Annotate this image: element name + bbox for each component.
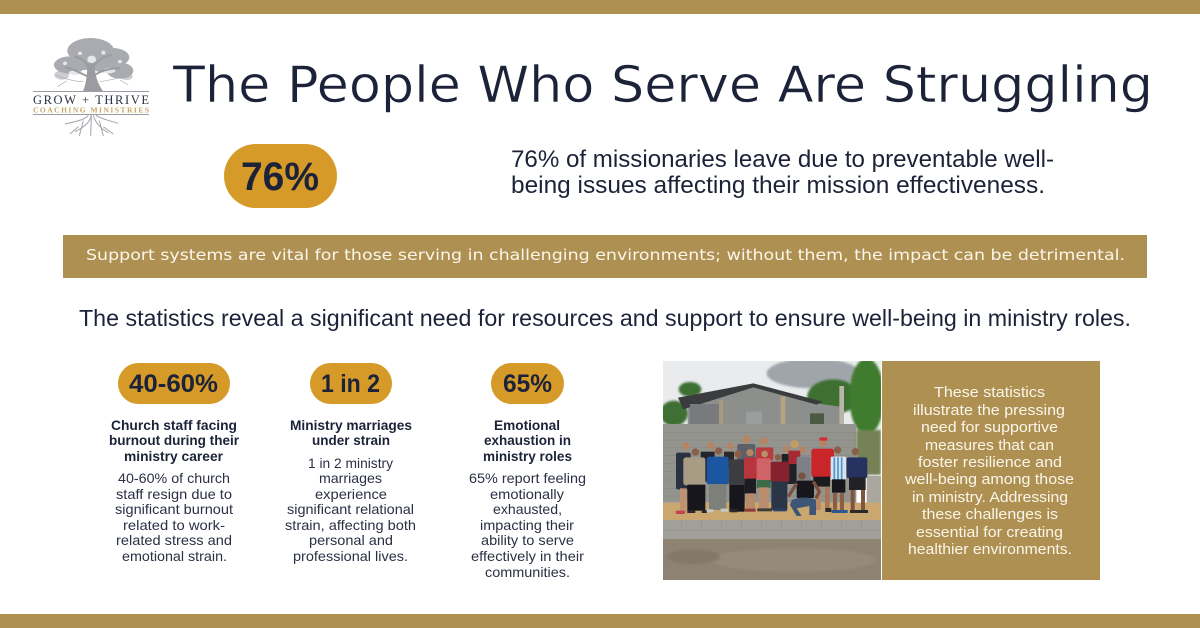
title: The People Who Serve Are Struggling: [172, 56, 1153, 114]
back row: [676, 444, 834, 512]
column body: strain, affecting both: [285, 517, 416, 533]
column body: [469, 470, 586, 580]
panel: summary callout: these challenges is: [922, 506, 1058, 523]
column heading: [483, 417, 572, 464]
sand: [663, 503, 881, 520]
column body: [115, 470, 233, 564]
column heading: Emotional: [494, 417, 560, 433]
column heading: burnout during their: [109, 432, 240, 448]
panel: summary callout: well-being among those: [904, 471, 1074, 488]
subheading: The statistics reveal a significant need for resources and support to ensure well-being in ministry roles.: [79, 305, 1131, 331]
column heading: ministry roles: [483, 448, 572, 464]
pill: 40-60%: [118, 363, 230, 404]
column body: effectively in their: [471, 548, 584, 564]
column body: significant relational: [287, 501, 414, 517]
stat description: 76% of missionaries leave due to preventable well-: [511, 146, 1054, 173]
panel: summary callout: need for supportive: [921, 419, 1058, 436]
bottom border band: [0, 614, 1200, 628]
panel: summary callout: [882, 361, 1100, 580]
banner: support systems: [63, 235, 1147, 278]
column body: emotionally: [490, 486, 564, 502]
column body: related to work-: [123, 517, 225, 533]
top border band: [0, 0, 1200, 14]
column body: communities.: [485, 564, 570, 580]
stat column: 65%: [469, 363, 586, 580]
shoes: [676, 508, 868, 514]
column heading: Church staff facing: [111, 417, 237, 433]
stat description: being issues affecting their mission effectiveness.: [511, 172, 1045, 199]
column heading: ministry career: [124, 448, 224, 464]
front row heads: [692, 446, 859, 461]
building: [688, 387, 840, 425]
column body: significant burnout: [115, 501, 233, 517]
sky: [663, 361, 881, 461]
logo tagline: COACHING MINISTRIES: [33, 106, 149, 114]
column heading: exhaustion in: [484, 432, 571, 448]
panel: summary callout: measures that can: [925, 437, 1054, 454]
team members: [676, 435, 868, 516]
back row heads: [682, 435, 827, 453]
panel: summary callout: healthier environments.: [908, 541, 1072, 558]
icon: oak tree canopy and trunk: [54, 38, 133, 92]
panel: summary callout: These statistics: [934, 384, 1045, 401]
stat column: 40-60%: [109, 363, 240, 564]
stat description: [511, 146, 1054, 199]
stat pill: 76%: [224, 144, 337, 208]
column heading: under strain: [312, 432, 390, 448]
block wall: [663, 424, 856, 503]
icon: tree roots: [65, 115, 118, 136]
column heading: Ministry marriages: [290, 417, 412, 433]
pill: 65%: 65%: [503, 370, 552, 398]
low block wall: [663, 520, 881, 539]
column body: marriages: [319, 470, 382, 486]
stat column: 1 in 2: [285, 363, 416, 564]
banner: support systems: Support systems are vital for those serving in challenging environments; without them, the impact can be detrimental.: [86, 246, 1125, 264]
ground: [663, 539, 881, 580]
column body: staff resign due to: [116, 486, 232, 502]
column body: personal and: [309, 532, 393, 548]
photo: ministry team in front of block building: [660, 358, 884, 580]
logo: Grow + Thrive Coaching Ministries: [33, 38, 149, 136]
column body: experience: [315, 486, 387, 502]
logo rule top: [33, 91, 149, 92]
pill: 65%: [491, 363, 564, 404]
column body: [285, 455, 416, 564]
front row bodies: [683, 457, 867, 512]
column body: related stress and: [116, 532, 232, 548]
column body: 1 in 2 ministry: [308, 455, 393, 471]
column body: 40-60% of church: [118, 470, 230, 486]
column body: 65% report feeling: [469, 470, 586, 486]
trees: [660, 358, 884, 435]
pill: 1 in 2: 1 in 2: [321, 370, 380, 398]
column body: impacting their: [480, 517, 574, 533]
pill: 40-60%: 40-60%: [129, 370, 218, 398]
logo rule bottom: [33, 114, 149, 115]
panel: summary callout: essential for creating: [916, 524, 1063, 541]
column body: ability to serve: [481, 532, 574, 548]
panel: summary callout: in ministry. Addressing: [912, 489, 1068, 506]
stat pill: 76%: 76%: [241, 155, 319, 199]
logo wordmark: GROW + THRIVE: [33, 93, 149, 107]
crouching man: [788, 472, 819, 516]
panel: summary callout: foster resilience and: [918, 454, 1062, 471]
column heading: [290, 417, 412, 448]
pill: 1 in 2: [310, 363, 392, 404]
column body: exhausted,: [493, 501, 562, 517]
column heading: [109, 417, 240, 464]
column body: emotional strain.: [122, 548, 227, 564]
column body: professional lives.: [293, 548, 408, 564]
panel: summary callout: illustrate the pressing: [913, 402, 1065, 419]
